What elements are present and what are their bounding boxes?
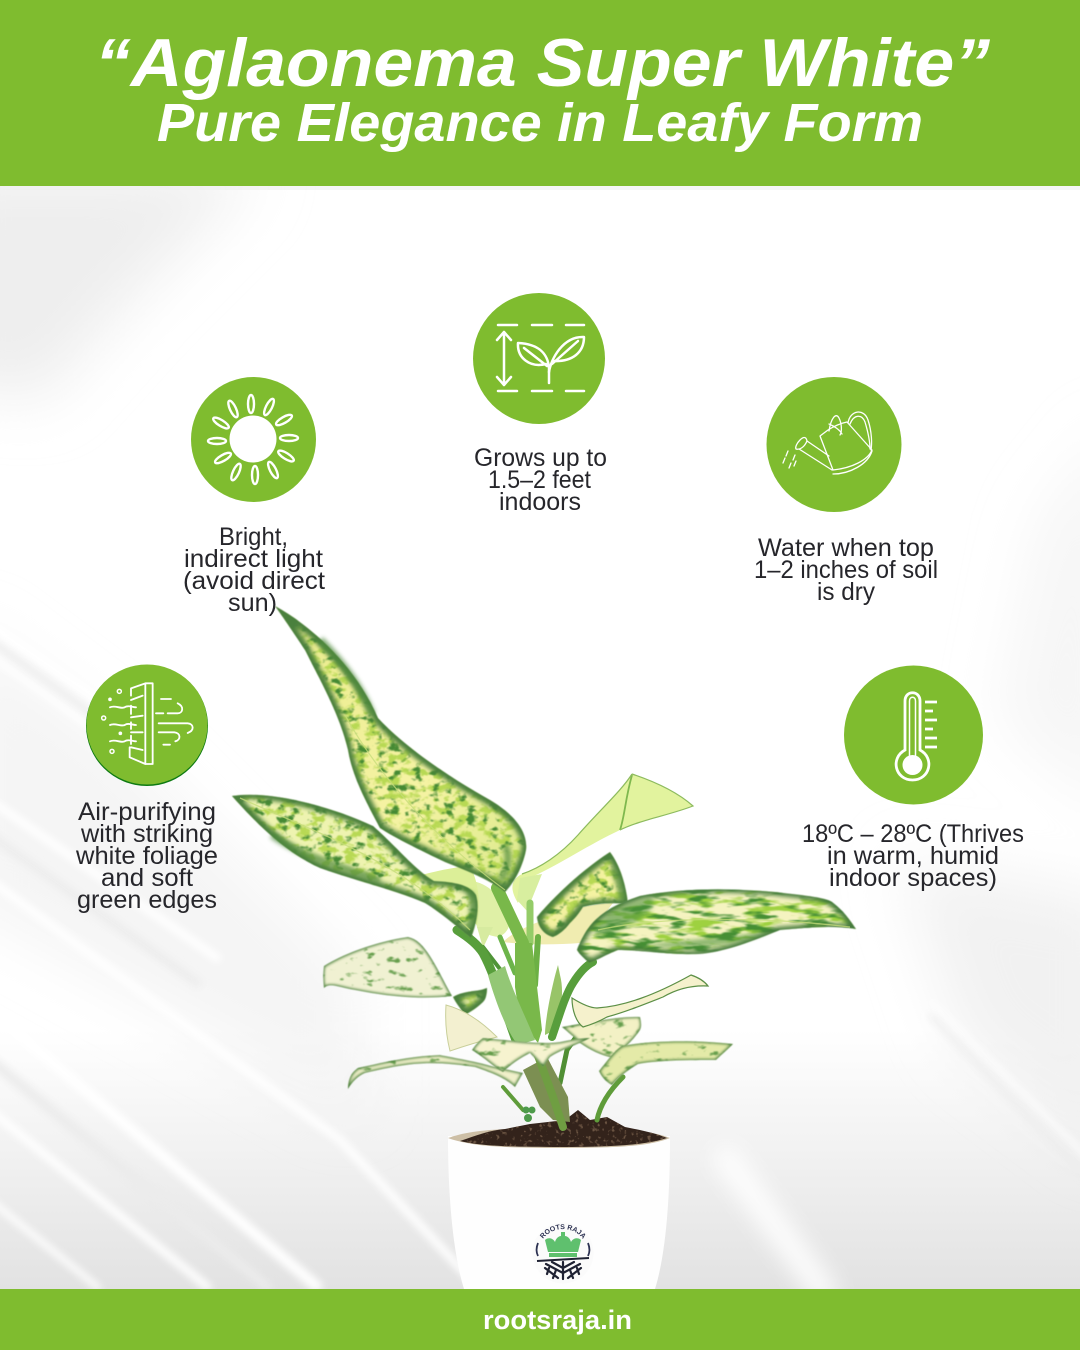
label: growth height: indoors xyxy=(499,488,581,516)
plant in pot xyxy=(232,606,856,1289)
low right leaf xyxy=(562,1017,641,1058)
label: growth height xyxy=(474,444,607,516)
label: air purifying: and soft xyxy=(101,864,193,892)
left leaf xyxy=(232,795,478,938)
label: light: Bright, xyxy=(219,523,288,551)
right big leaf xyxy=(577,889,856,963)
label: growth height: 1.5–2 feet xyxy=(488,466,591,494)
label: growth height: Grows up to xyxy=(474,444,607,472)
footer band xyxy=(0,1289,1080,1350)
title banner xyxy=(0,0,1080,186)
label: light: indirect light xyxy=(184,545,323,573)
stems xyxy=(457,888,623,1127)
midribs xyxy=(240,715,850,930)
label: air purifying: with striking xyxy=(80,820,213,848)
label: temperature: in warm, humid xyxy=(827,842,999,870)
label: light: sun) xyxy=(228,589,277,617)
dark leaf margins xyxy=(272,640,622,928)
icon: watering can xyxy=(766,377,902,512)
label: watering xyxy=(754,534,938,606)
label: temperature xyxy=(802,820,1024,892)
label: watering: Water when top xyxy=(758,534,934,562)
website: rootsraja.in xyxy=(483,1305,632,1335)
label: air purifying: white foliage xyxy=(75,842,218,870)
icon: sun xyxy=(191,377,316,502)
logo badge: ROOTS RAJA xyxy=(540,1224,586,1239)
title: “Aglaonema Super White” xyxy=(95,25,990,101)
label: light xyxy=(183,523,325,617)
low left leaf xyxy=(348,1055,523,1089)
small hooked leaf xyxy=(453,988,487,1015)
label: watering: is dry xyxy=(817,578,875,606)
label: air purifying xyxy=(75,798,218,914)
label: watering: 1–2 inches of soil xyxy=(754,556,938,584)
label: air purifying: green edges xyxy=(77,886,217,914)
subtitle: Pure Elegance in Leafy Form xyxy=(157,93,923,153)
icon: growth height xyxy=(473,293,605,424)
pot xyxy=(448,1078,670,1289)
mottled middle leaf xyxy=(537,852,628,937)
clover xyxy=(522,1106,536,1122)
dark blotch on right leaf xyxy=(594,898,770,947)
icon: thermometer xyxy=(844,666,983,804)
far right low leaf xyxy=(599,1041,733,1085)
label: temperature: 18ºC – 28ºC (Thrives xyxy=(802,820,1024,848)
logo badge xyxy=(536,1224,590,1280)
left medium leaf xyxy=(323,937,452,998)
top leaf xyxy=(275,606,526,892)
icon: air purifying xyxy=(86,664,208,786)
label: air purifying: Air-purifying xyxy=(78,798,216,826)
center low leaf xyxy=(472,1038,590,1072)
pale leaves behind stems xyxy=(360,774,693,948)
label: temperature: indoor spaces) xyxy=(829,864,997,892)
curled right leaf xyxy=(572,975,708,1027)
label: light: (avoid direct xyxy=(183,567,325,595)
soil xyxy=(460,1110,667,1147)
pale low leaf xyxy=(446,1005,497,1051)
